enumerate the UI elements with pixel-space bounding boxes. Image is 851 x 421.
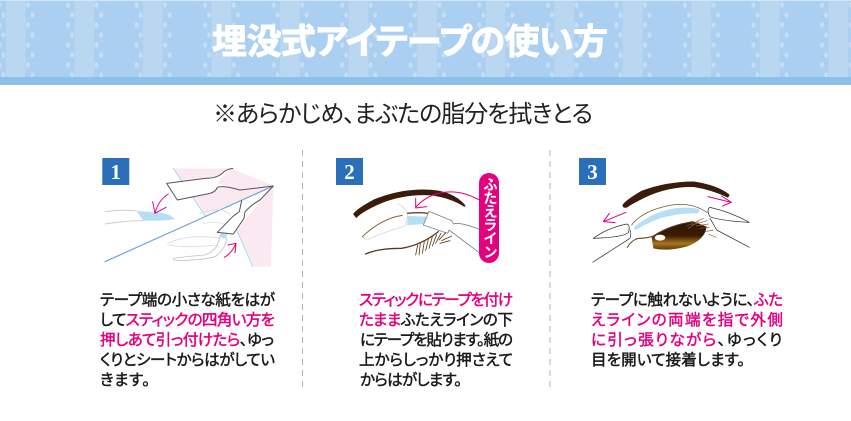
step 1 text: テープ端の小さな紙をはが bbox=[100, 291, 276, 309]
step 1 text bbox=[100, 291, 276, 389]
step 1 text: してスティックの四角い方を bbox=[100, 311, 275, 329]
divider bbox=[302, 150, 304, 390]
illustration: tape applied along crease bbox=[354, 191, 479, 255]
step 2 text bbox=[359, 291, 513, 389]
label pill: crease line: ふたえライン bbox=[481, 177, 497, 259]
step number 2: 2 bbox=[344, 160, 355, 184]
step 2 text: からはがします。 bbox=[360, 371, 462, 389]
illustration: peeling tape with stick bbox=[105, 168, 273, 267]
illustration: stretching crease with fingers bbox=[593, 182, 749, 262]
step 3 text: えラインの両端を指で外側 bbox=[591, 311, 783, 329]
step 3 text: 目を開いて接着します。 bbox=[591, 351, 745, 369]
panel: step 3 bbox=[579, 158, 783, 369]
step 2 text: 上からしっかり押さえて bbox=[359, 351, 513, 369]
step 2 text: にテープを貼ります。紙の bbox=[360, 331, 513, 349]
header banner bbox=[0, 0, 851, 85]
step 2 text: スティックにテープを付け bbox=[359, 291, 513, 309]
step 1 text: 押しあて引っ付けたら、ゆっ bbox=[100, 331, 274, 349]
step number 2 bbox=[336, 158, 363, 185]
step 1 text: くりとシートからはがしてい bbox=[100, 351, 275, 369]
step number 1: 1 bbox=[111, 160, 121, 184]
step 2 text: たままふたえラインの下 bbox=[359, 311, 513, 329]
panel: step 1 bbox=[100, 158, 276, 389]
divider bbox=[549, 150, 551, 390]
step number 3 bbox=[579, 158, 606, 185]
step number 1 bbox=[102, 158, 129, 185]
panel: step 2 bbox=[336, 158, 513, 389]
step 1 text: きます。 bbox=[100, 371, 150, 389]
subheading note: ※あらかじめ、まぶたの脂分を拭きとる bbox=[213, 101, 593, 128]
step 3 text bbox=[591, 291, 783, 369]
title: 埋没式アイテープの使い方 bbox=[212, 23, 608, 62]
step 3 text: テープに触れないように、ふた bbox=[591, 291, 783, 309]
step number 3: 3 bbox=[587, 160, 598, 184]
step 3 text: に引っ張りながら、ゆっくり bbox=[591, 331, 782, 349]
